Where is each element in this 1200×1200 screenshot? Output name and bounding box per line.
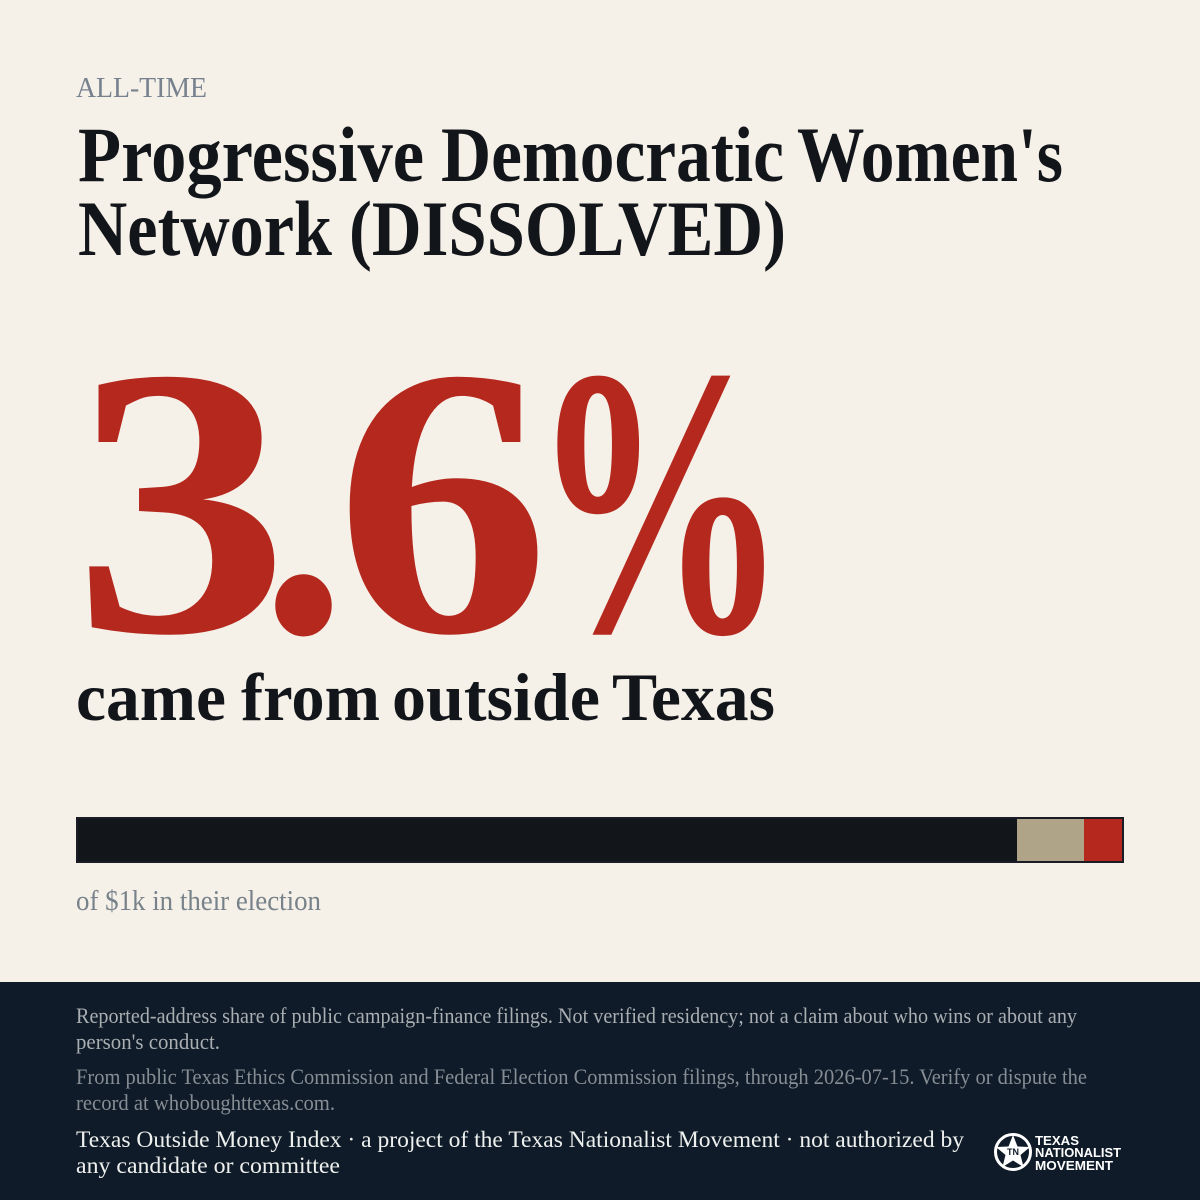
disclaimer text: person's conduct. — [76, 1029, 220, 1054]
disclaimer text: Reported-address share of public campaign-finance filings. Not verified residency; not a claim about who wins or about any — [76, 1003, 1077, 1028]
eyebrow label: ALL-TIME — [76, 73, 207, 104]
title: Democratic — [441, 111, 784, 198]
title: Women's — [797, 111, 1063, 198]
stacked bar — [76, 817, 1124, 863]
icon: star in circle: TN — [1007, 1147, 1019, 1157]
title: Progressive — [78, 111, 424, 198]
bar caption: of $1k in their election — [76, 885, 321, 917]
big percentage: % — [531, 290, 788, 715]
attribution text: Texas Outside Money Index · a project of the Texas Nationalist Movement · not authorized by — [76, 1127, 964, 1152]
disclaimer text — [76, 1003, 1077, 1054]
subheading — [76, 659, 775, 735]
logo: Texas Nationalist Movement — [996, 1133, 1121, 1173]
attribution text: any candidate or committee — [76, 1153, 340, 1178]
subheading: Texas — [612, 659, 775, 735]
subheading: from — [241, 659, 380, 735]
logo wordmark: MOVEMENT — [1035, 1158, 1113, 1173]
logo wordmark — [1035, 1133, 1121, 1173]
big percentage: 3 — [73, 290, 289, 715]
big percentage: . — [260, 290, 347, 715]
title: (DISSOLVED) — [349, 185, 786, 272]
logo wordmark: NATIONALIST — [1035, 1145, 1121, 1160]
logo wordmark: TEXAS — [1035, 1133, 1079, 1148]
title — [78, 111, 1063, 272]
footer panel — [0, 982, 1200, 1200]
attribution text — [76, 1127, 964, 1178]
subheading: outside — [392, 659, 600, 735]
title: Network — [78, 185, 333, 272]
big percentage: 6 — [335, 290, 550, 715]
source text: record at whoboughttexas.com. — [76, 1090, 335, 1115]
source text — [76, 1064, 1087, 1115]
subheading: came — [76, 659, 226, 735]
source text: From public Texas Ethics Commission and Federal Election Commission filings, through 2026-07-15. Verify or dispute the — [76, 1064, 1087, 1089]
big percentage — [73, 290, 788, 715]
